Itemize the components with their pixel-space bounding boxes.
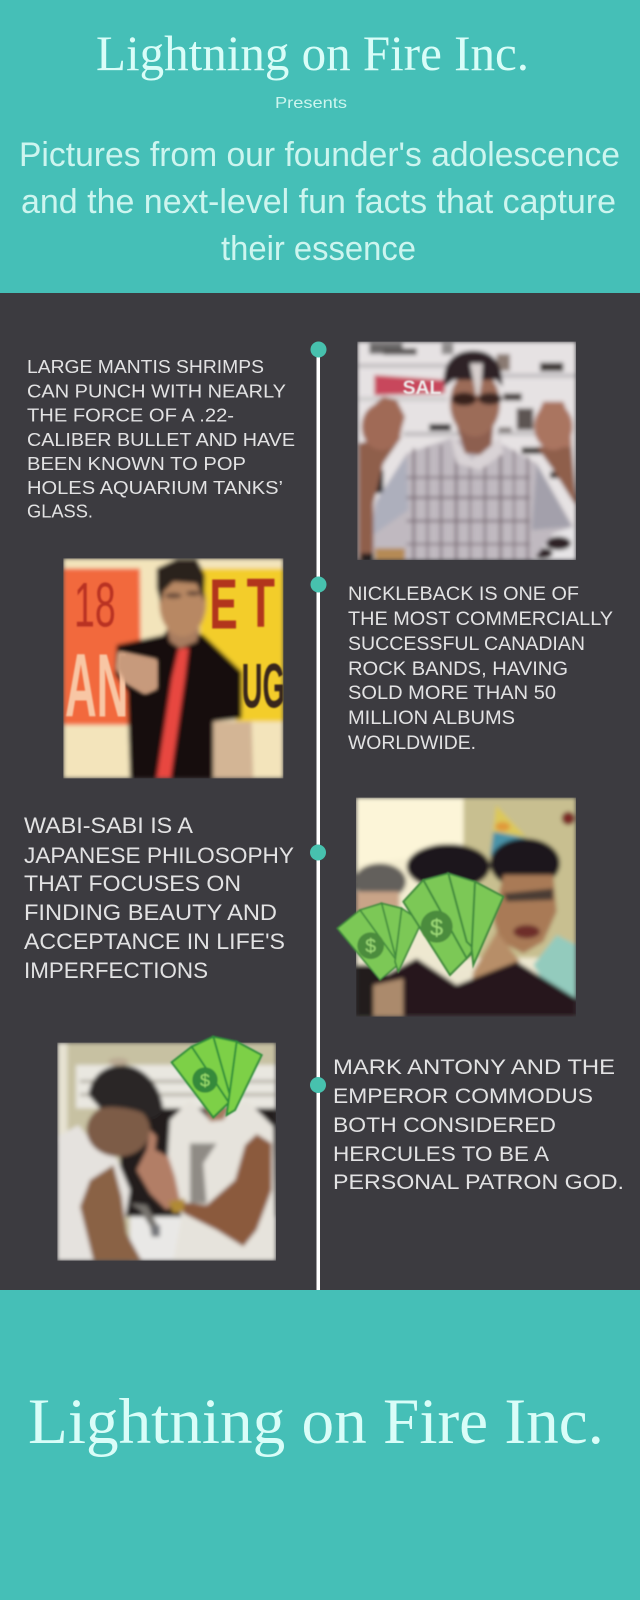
- subtitle: their essence: [221, 230, 416, 268]
- subtitle: and the next-level fun facts that capture: [21, 183, 616, 221]
- text block: mantis shrimp fact: GLASS.: [27, 500, 93, 522]
- text block: nickleback fact: THE MOST COMMERCIALLY: [348, 609, 613, 630]
- text block: mantis shrimp fact: CALIBER BULLET AND HAVE: [27, 429, 295, 450]
- text block: wabi-sabi fact: [24, 813, 294, 983]
- text block: nickleback fact: MILLION ALBUMS: [348, 708, 515, 729]
- icon: money fans: [337, 873, 503, 980]
- text block: wabi-sabi fact: IMPERFECTIONS: [24, 958, 208, 983]
- timeline dot 2: [310, 576, 326, 592]
- photo 4: two men in sleeveless shirts with money over face: [57, 1037, 277, 1261]
- text block: mark antony fact: EMPEROR COMMODUS: [333, 1084, 593, 1108]
- text block: mantis shrimp fact: HOLES AQUARIUM TANKS’: [27, 477, 283, 498]
- text: UG: [242, 652, 285, 722]
- panel: timeline background: [0, 293, 640, 1290]
- text block: nickleback fact: SOLD MORE THAN 50: [348, 683, 556, 704]
- text block: wabi-sabi fact: THAT FOCUSES ON: [24, 871, 241, 896]
- subtitle: [19, 136, 620, 268]
- text block: wabi-sabi fact: ACCEPTANCE IN LIFE'S: [24, 929, 285, 954]
- title: Lightning on Fire Inc.: [96, 25, 529, 81]
- timeline dot 1: [310, 342, 326, 358]
- icon: money fan: $: [200, 1071, 210, 1091]
- panel: header background: [0, 0, 640, 293]
- photo 2: man with red tie pointing at viewer: [63, 558, 285, 778]
- photo 1: man in plaid shirt in shoe store: SAL: [403, 378, 442, 399]
- text block: mantis shrimp fact: THE FORCE OF A .22-: [27, 404, 234, 426]
- subtitle: Pictures from our founder's adolescence: [19, 136, 620, 174]
- icon: money fans: $: [365, 937, 376, 958]
- text block: nickleback fact: [348, 584, 613, 754]
- text block: nickleback fact: WORLDWIDE.: [348, 733, 476, 754]
- photo 2: man with red tie pointing at viewer: 18: [74, 571, 116, 641]
- text block: mark antony fact: PERSONAL PATRON GOD.: [333, 1170, 624, 1194]
- text block: mark antony fact: [333, 1055, 624, 1194]
- text block: mark antony fact: HERCULES TO BE A: [333, 1142, 550, 1166]
- text block: nickleback fact: ROCK BANDS, HAVING: [348, 659, 568, 680]
- icon: money fans: $: [430, 914, 443, 940]
- timeline dot 4: [310, 1077, 326, 1093]
- photo 3: three friends with money over faces: [337, 798, 576, 1017]
- text block: mark antony fact: BOTH CONSIDERED: [333, 1113, 556, 1137]
- text block: mantis shrimp fact: BEEN KNOWN TO POP: [27, 453, 246, 474]
- photo 2: man with red tie pointing at viewer: T: [247, 564, 275, 642]
- text block: nickleback fact: SUCCESSFUL CANADIAN: [348, 634, 585, 655]
- panel: footer background: [0, 1290, 640, 1600]
- text block: mantis shrimp fact: [27, 356, 295, 522]
- presents label: Presents: [275, 95, 347, 112]
- footer title: Lightning on Fire Inc.: [28, 1386, 604, 1458]
- text block: mantis shrimp fact: LARGE MANTIS SHRIMPS: [27, 356, 264, 377]
- photo 2: man with red tie pointing at viewer: E: [209, 564, 238, 644]
- text block: mark antony fact: MARK ANTONY AND THE: [333, 1055, 615, 1079]
- text block: wabi-sabi fact: FINDING BEAUTY AND: [24, 900, 277, 925]
- photo 1: man in plaid shirt in shoe store: [357, 342, 577, 560]
- photo 2: man with red tie pointing at viewer: AN: [65, 637, 128, 737]
- icon: money fan: [172, 1037, 262, 1117]
- text block: wabi-sabi fact: WABI-SABI IS A: [24, 813, 193, 838]
- timeline line: [316, 349, 320, 1290]
- timeline dot 3: [310, 844, 326, 860]
- text block: nickleback fact: NICKLEBACK IS ONE OF: [348, 584, 579, 605]
- text block: wabi-sabi fact: JAPANESE PHILOSOPHY: [24, 843, 294, 868]
- text block: mantis shrimp fact: CAN PUNCH WITH NEARLY: [27, 380, 286, 402]
